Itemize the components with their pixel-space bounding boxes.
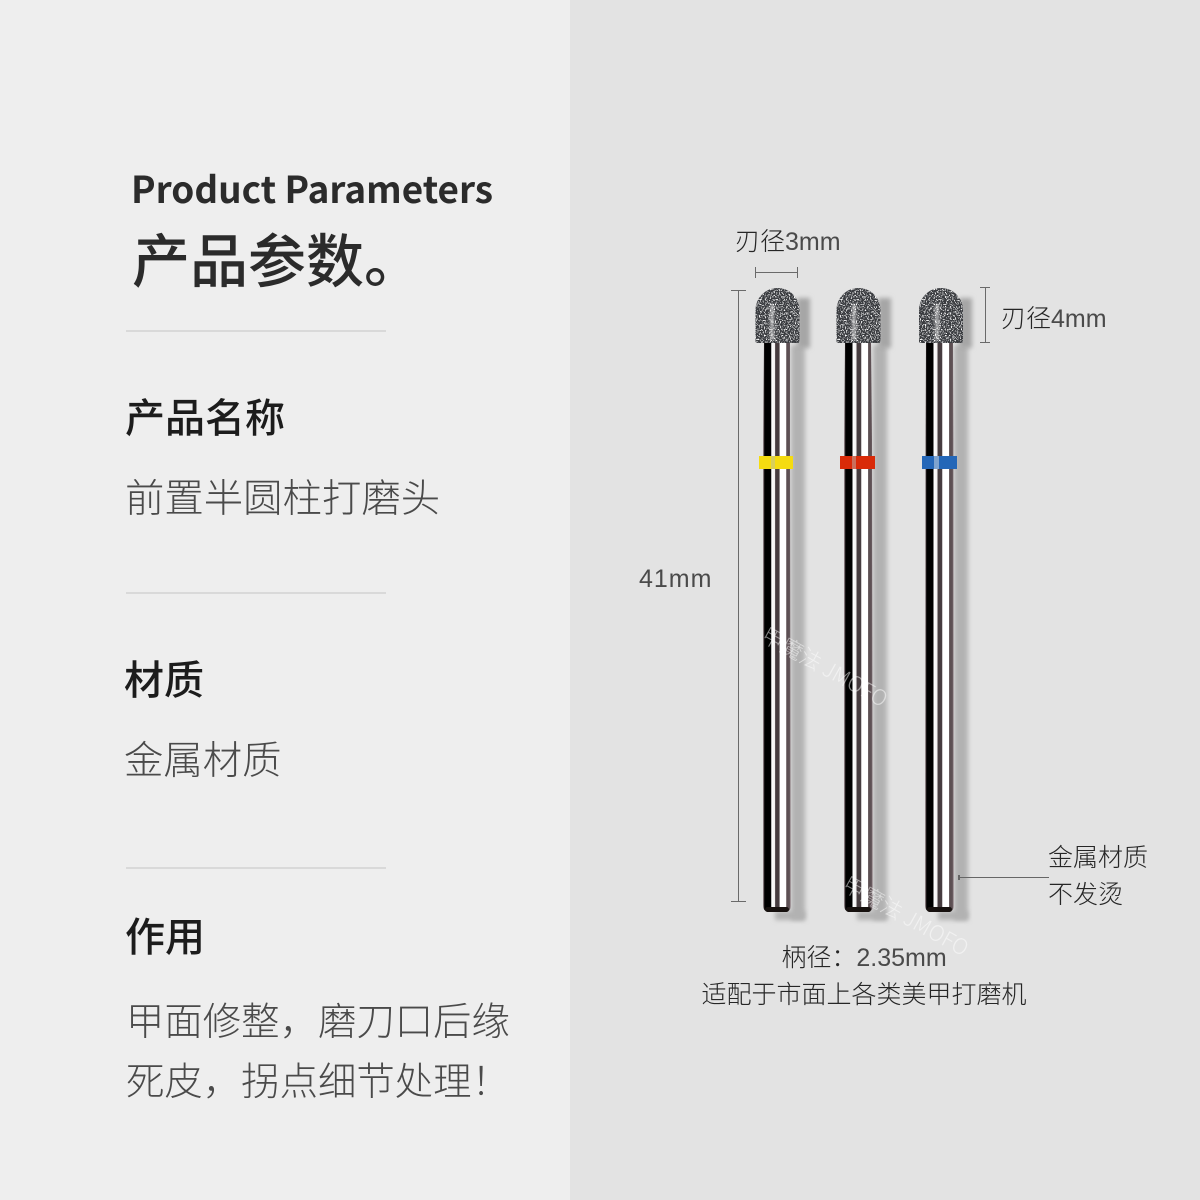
text: function description: 死皮，拐点细节处理！ [126,1051,510,1107]
text: function description: 甲面修整，磨刀口后缘 [126,991,510,1047]
caption: shank diameter and compatibility: 适配于市面上各类美甲打磨机 [701,981,1026,1009]
heading: function: 作用 [125,905,205,963]
label: head diameter 3mm: 刃径3mm [735,228,841,256]
label: total length 41mm: 41mm [639,565,712,593]
dimension: total length bracket [731,290,746,902]
panel: right background [570,0,1200,1200]
text: material value: 金属材质 [124,729,282,786]
panel: product parameter list [124,160,510,1107]
heading: material: 材质 [124,648,204,706]
heading: English title: Product Parameters [131,160,493,214]
callout: metal does not heat: 金属材质 [1048,844,1148,872]
bur: yellow band [756,288,810,920]
heading: product name: 产品名称 [125,386,285,444]
dimension: head length bracket [980,288,990,342]
leader line: metal callout [958,875,1049,880]
heading: Chinese title: 产品参数。 [132,215,422,299]
text: function description [126,991,510,1107]
callout: metal does not heat: 不发烫 [1048,881,1123,909]
bur: blue band [919,288,972,920]
dimension: head width bracket [756,267,798,278]
watermark: lower: 甲魔法 JMOFO [838,868,975,963]
caption: shank diameter and compatibility: 柄径：2.35mm [781,944,947,972]
label: head length 4mm: 刃径4mm [1001,305,1107,333]
text: product name value: 前置半圆柱打磨头 [125,467,440,524]
watermark: upper: 甲魔法 JMOFO [757,619,894,714]
callout: metal does not heat [1048,844,1148,909]
bur: red band [836,288,891,920]
caption: shank diameter and compatibility [701,944,1026,1009]
